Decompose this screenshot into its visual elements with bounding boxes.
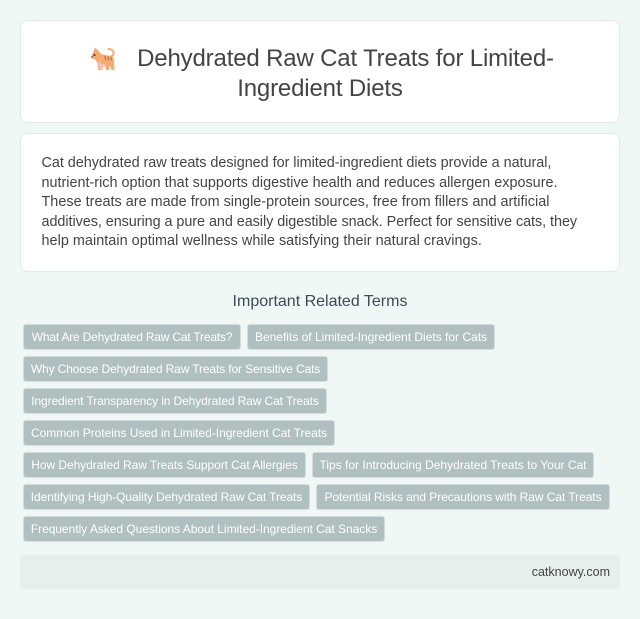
section heading: Important Related Terms [233, 293, 407, 310]
footer site name: catknowy.com [532, 565, 610, 579]
tag [23, 356, 328, 382]
title: Ingredient Diets [237, 75, 403, 102]
intro paragraph: help maintain optimal wellness while satisfying their natural cravings. [42, 233, 482, 249]
tag: Ingredient Transparency in Dehydrated Raw Cat Treats [31, 394, 319, 408]
tag: Common Proteins Used in Limited-Ingredient Cat Treats [31, 426, 327, 440]
title [137, 45, 554, 102]
tag: Benefits of Limited-Ingredient Diets for Cats [255, 330, 487, 344]
tag [23, 452, 306, 478]
related terms tags [23, 324, 610, 542]
tag: Why Choose Dehydrated Raw Treats for Sensitive Cats [31, 362, 320, 376]
icon: cat [91, 48, 115, 70]
footer bar [20, 555, 620, 589]
intro text panel [20, 133, 620, 272]
tag [23, 388, 327, 414]
tag [316, 484, 610, 510]
tag [23, 484, 310, 510]
tag [312, 452, 594, 478]
tag: Identifying High-Quality Dehydrated Raw Cat Treats [31, 490, 302, 504]
intro paragraph: These treats are made from single-protein sources, free from fillers and artificial [42, 194, 549, 210]
header panel [20, 20, 620, 123]
tag [247, 324, 495, 350]
tag: What Are Dehydrated Raw Cat Treats? [32, 330, 232, 344]
tag [23, 516, 385, 542]
tag: Potential Risks and Precautions with Raw Cat Treats [324, 490, 602, 504]
tag: Frequently Asked Questions About Limited-Ingredient Cat Snacks [31, 522, 377, 536]
intro paragraph: nutrient-rich option that supports digestive health and reduces allergen exposure. [42, 175, 557, 191]
intro paragraph [42, 155, 577, 249]
title: Dehydrated Raw Cat Treats for Limited- [137, 45, 554, 72]
tag: How Dehydrated Raw Treats Support Cat Allergies [31, 458, 298, 472]
intro paragraph: Cat dehydrated raw treats designed for limited-ingredient diets provide a natural, [42, 155, 551, 171]
intro paragraph: additives, ensuring a pure and easily digestible snack. Perfect for sensitive cats, they [42, 214, 577, 230]
tag: Tips for Introducing Dehydrated Treats to Your Cat [319, 458, 587, 472]
tag [23, 324, 241, 350]
tag [23, 420, 335, 446]
